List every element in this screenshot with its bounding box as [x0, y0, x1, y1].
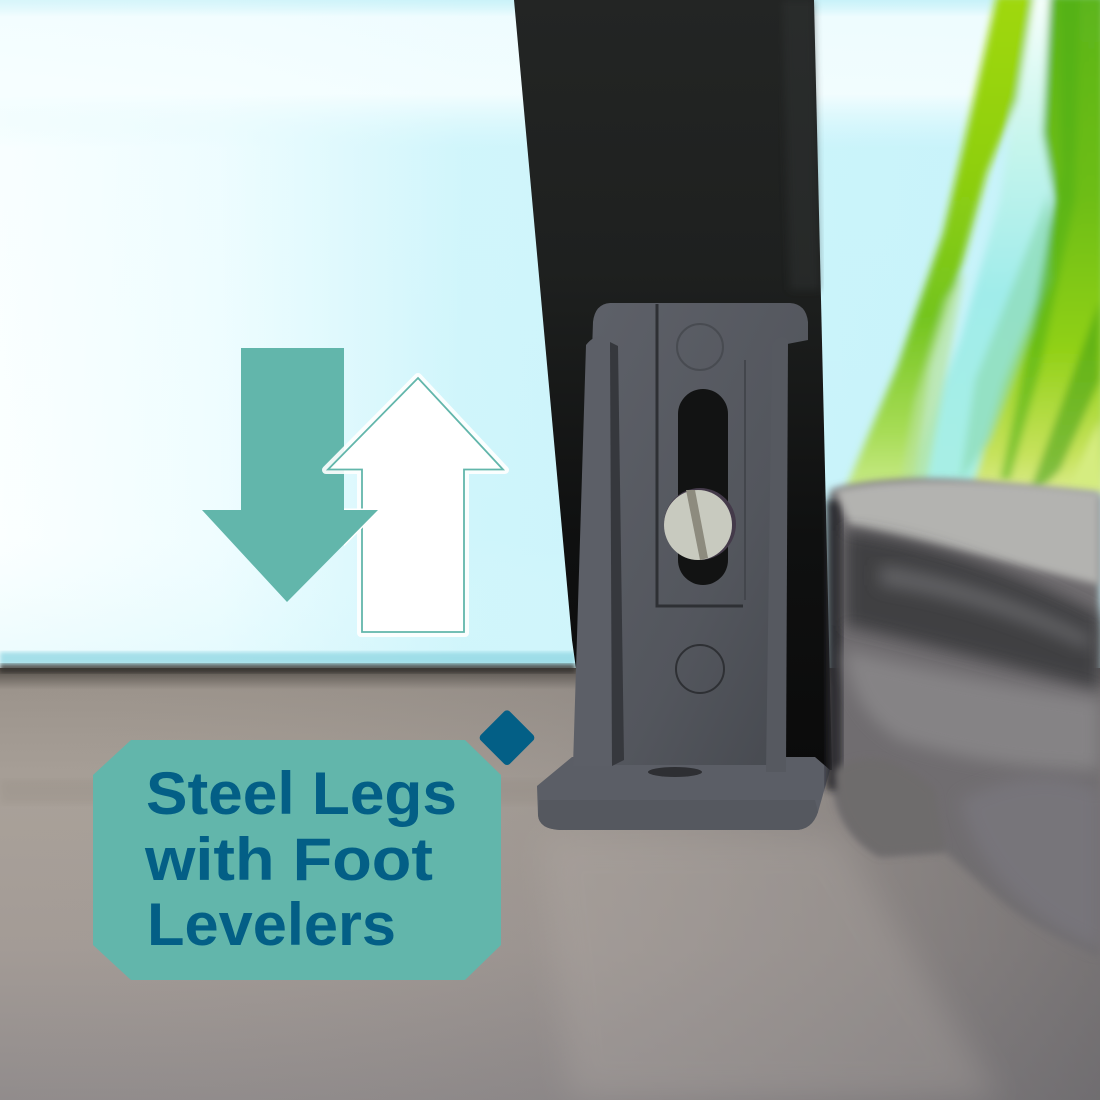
grey towel	[826, 480, 1100, 958]
icon: white up arrow	[326, 377, 505, 633]
callout background	[93, 740, 501, 980]
black steel table leg	[514, 0, 832, 770]
right rib	[766, 337, 788, 772]
floor surface	[0, 664, 1100, 1100]
slot screw	[664, 488, 736, 560]
icon: navy diamond	[478, 709, 536, 767]
plastic foot leveler	[537, 303, 830, 830]
center channel lines	[657, 304, 743, 606]
callout: product feature label	[93, 740, 501, 980]
icon: teal down arrow	[202, 348, 378, 602]
icon: down arrow head overlapping the up arrow	[344, 508, 378, 546]
foot base	[537, 757, 830, 830]
left rib	[573, 337, 612, 766]
wall backdrop	[0, 0, 1100, 672]
foot bracket plate	[578, 303, 808, 765]
green grass blades	[845, 0, 1100, 495]
adjustment slot	[678, 389, 728, 585]
callout text: with Foot	[144, 826, 433, 893]
callout text: Steel Legs	[146, 760, 457, 827]
callout text: Levelers	[147, 891, 396, 958]
